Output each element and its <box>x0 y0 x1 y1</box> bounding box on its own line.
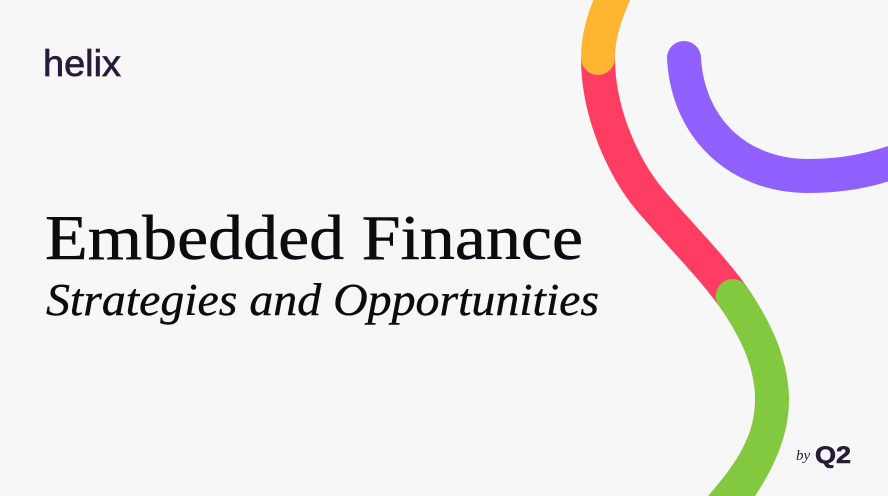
ribbon: purple arc <box>684 58 888 176</box>
logo: by Q2: Q2 <box>815 442 851 469</box>
ribbon: green segment <box>708 279 789 496</box>
logo: helix: helix <box>43 43 121 84</box>
subtitle: Strategies and Opportunities <box>46 275 599 325</box>
title: Embedded Finance <box>45 202 583 273</box>
ribbon: yellow segment <box>598 0 615 58</box>
ribbon: red segment <box>598 58 732 295</box>
logo: by Q2 <box>796 442 851 469</box>
logo: by Q2: by <box>796 448 810 464</box>
